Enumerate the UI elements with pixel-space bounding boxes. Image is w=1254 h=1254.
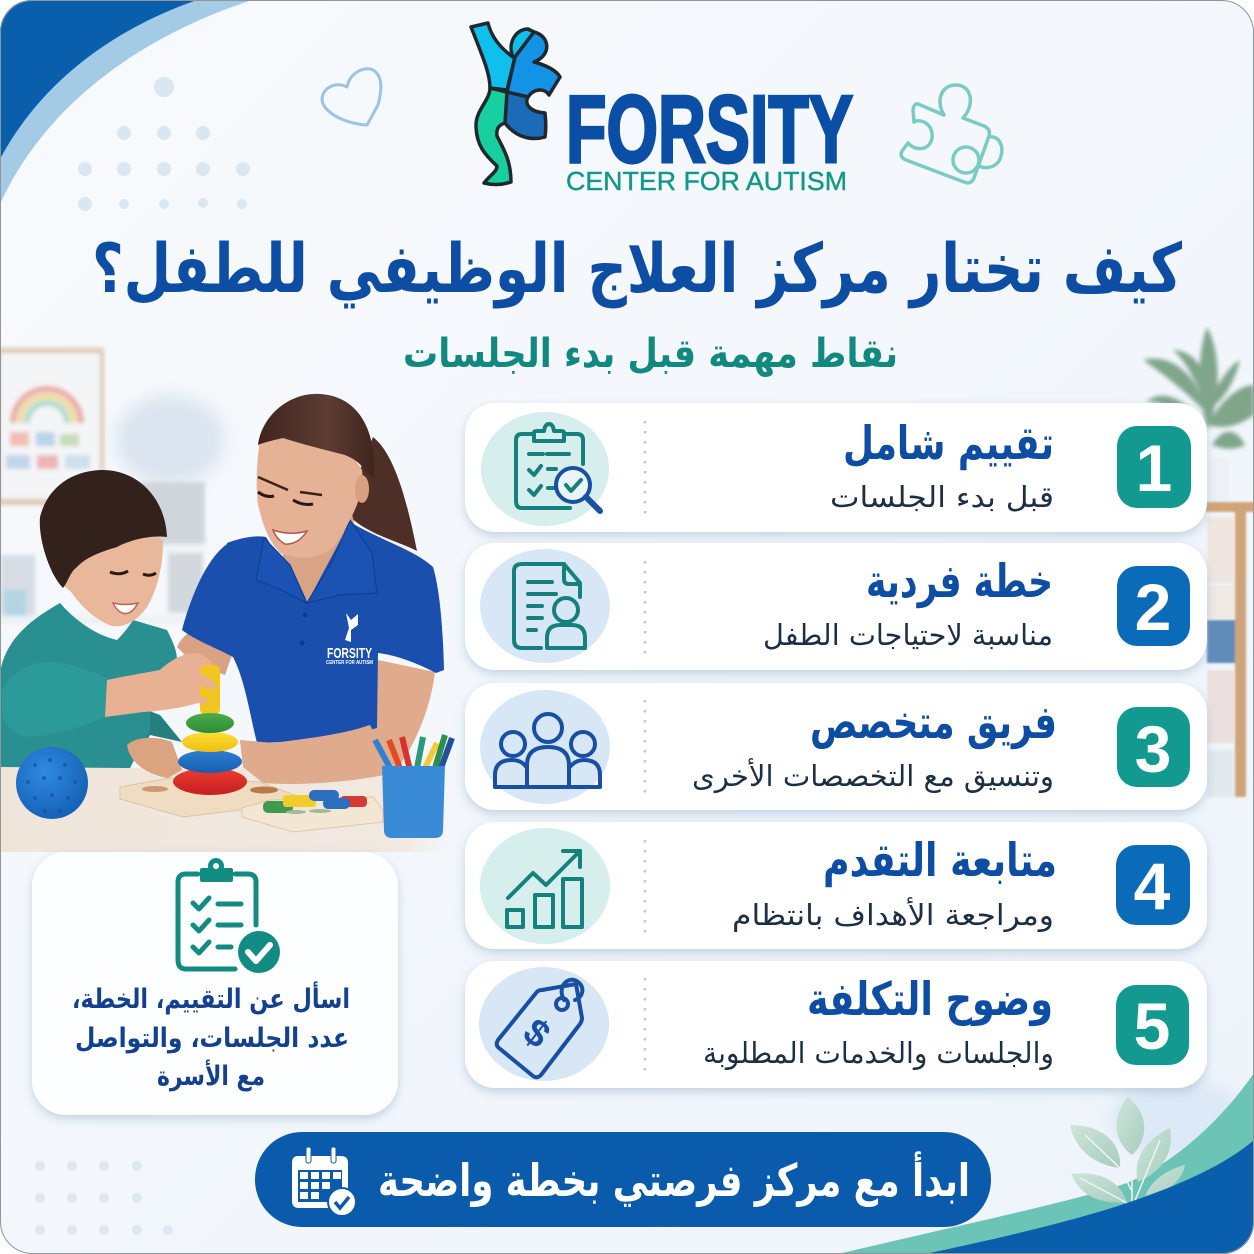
icon: calendar [292, 1147, 356, 1216]
panel: step 1 [465, 403, 1207, 532]
collar [256, 520, 377, 603]
number badge: 3 [1135, 712, 1171, 786]
step title: خطة فردية [866, 554, 1053, 608]
step title: تقييم شامل [843, 416, 1054, 470]
icon: puzzle outline [901, 85, 1002, 183]
icon: heart outline [322, 69, 381, 125]
icon background [481, 412, 609, 526]
bottom swoosh blue [925, 1140, 1254, 1254]
ear [50, 548, 70, 578]
banner: call to action [255, 1132, 991, 1227]
divider [644, 421, 646, 516]
icon: team of three [495, 714, 600, 787]
logo tagline: CENTER FOR AUTISM [566, 166, 847, 196]
blurred pot [1207, 458, 1229, 502]
panel: step 5 [465, 961, 1207, 1088]
arm [2, 662, 110, 737]
background room right side [1143, 327, 1254, 797]
step description: والجلسات والخدمات المطلوبة [703, 1036, 1054, 1070]
other hand [127, 738, 182, 778]
number badge: 5 [1134, 989, 1170, 1063]
shirt [182, 522, 444, 743]
icon background [480, 828, 610, 944]
shirt logo: CENTER FOR AUTISM [326, 660, 373, 666]
sleeve behind stacker [146, 712, 182, 742]
shirt logo [326, 613, 373, 666]
ear [355, 475, 369, 503]
panel: step 3 [465, 683, 1207, 810]
panel: step 4 [465, 822, 1207, 949]
face [257, 434, 362, 558]
child [0, 470, 220, 778]
step description: وتنسيق مع التخصصات الأخرى [692, 757, 1054, 793]
bottom swoosh teal [838, 1073, 1254, 1254]
icon background [480, 690, 610, 804]
loose shapes [263, 790, 367, 814]
decorative leaves [1070, 1097, 1185, 1203]
step title: فريق متخصص [810, 695, 1057, 749]
shirt logo: FORSITY [327, 645, 372, 662]
blurred classroom background [0, 348, 225, 624]
number badge [1117, 707, 1190, 787]
re-drawn forearm over table [240, 725, 393, 784]
callout text [72, 981, 350, 1092]
illustration: therapist and child [0, 348, 470, 852]
ponytail [350, 437, 417, 551]
neck [282, 515, 354, 602]
step title: متابعة التقدم [823, 833, 1057, 887]
therapist [177, 394, 444, 784]
logo [471, 23, 853, 196]
hair [258, 394, 374, 478]
number badge [1116, 985, 1189, 1065]
buttons [302, 612, 308, 618]
icon background [480, 549, 610, 663]
icon: price tag: $ [515, 1011, 558, 1057]
eyes [110, 571, 156, 575]
icon background [479, 967, 609, 1081]
divider [644, 561, 646, 656]
panel: step 2 [465, 543, 1207, 670]
step title: وضوح التكلفة [807, 972, 1053, 1026]
table [0, 767, 470, 852]
number badge [1117, 566, 1190, 646]
fingers [176, 671, 217, 704]
decorative dots top-left [78, 77, 250, 211]
poster [0, 348, 104, 505]
number badge: 2 [1135, 570, 1171, 644]
hair [40, 470, 167, 588]
icon: document with person [514, 564, 585, 648]
divider [644, 700, 646, 795]
number badge [1116, 845, 1190, 925]
stems [1080, 1135, 1160, 1203]
soft blob [115, 395, 225, 485]
far arm [177, 632, 232, 675]
blurred shelf [1205, 502, 1254, 797]
hand on peg [105, 653, 220, 717]
number badge: 1 [1136, 431, 1172, 505]
number badge [1117, 426, 1191, 508]
decorative dots bottom-left [35, 1161, 173, 1235]
icon: price tag [497, 980, 582, 1077]
shirt [0, 603, 177, 768]
near arm [240, 660, 435, 784]
icon: rising bar chart [507, 851, 582, 927]
banner text: ابدأ مع مركز فرصتي بخطة واضحة [378, 1151, 970, 1207]
divider [644, 978, 646, 1073]
subtitle: نقاط مهمة قبل بدء الجلسات [403, 331, 898, 377]
pencil cup [375, 735, 452, 838]
step description: مناسبة لاحتياجات الطفل [763, 618, 1053, 652]
step description: ومراجعة الأهداف بانتظام [732, 896, 1054, 932]
wooden boards [120, 778, 383, 832]
top-left swoosh [0, 0, 252, 204]
callout text: مع الأسرة [157, 1059, 265, 1092]
callout text: اسأل عن التقييم، الخطة، [72, 981, 350, 1015]
blurred plant [1143, 327, 1254, 449]
panel: callout card [32, 852, 398, 1115]
number badge: 4 [1134, 849, 1171, 923]
pale glow behind bottom swoosh [1110, 1082, 1236, 1160]
icon: clipboard with magnifier [516, 424, 583, 508]
logo wordmark: FORSITY [566, 76, 853, 183]
shelf [0, 482, 205, 624]
icon: checklist clipboard [178, 858, 280, 973]
divider [644, 840, 646, 935]
callout text: عدد الجلسات، والتواصل [75, 1023, 349, 1054]
ball [16, 747, 88, 819]
brows and eyes [258, 477, 322, 495]
mouth [113, 603, 138, 614]
ring stacker [173, 665, 247, 795]
step description: قبل بدء الجلسات [830, 480, 1054, 514]
head [51, 524, 163, 626]
logo figure [471, 23, 560, 184]
mouth [273, 530, 307, 544]
